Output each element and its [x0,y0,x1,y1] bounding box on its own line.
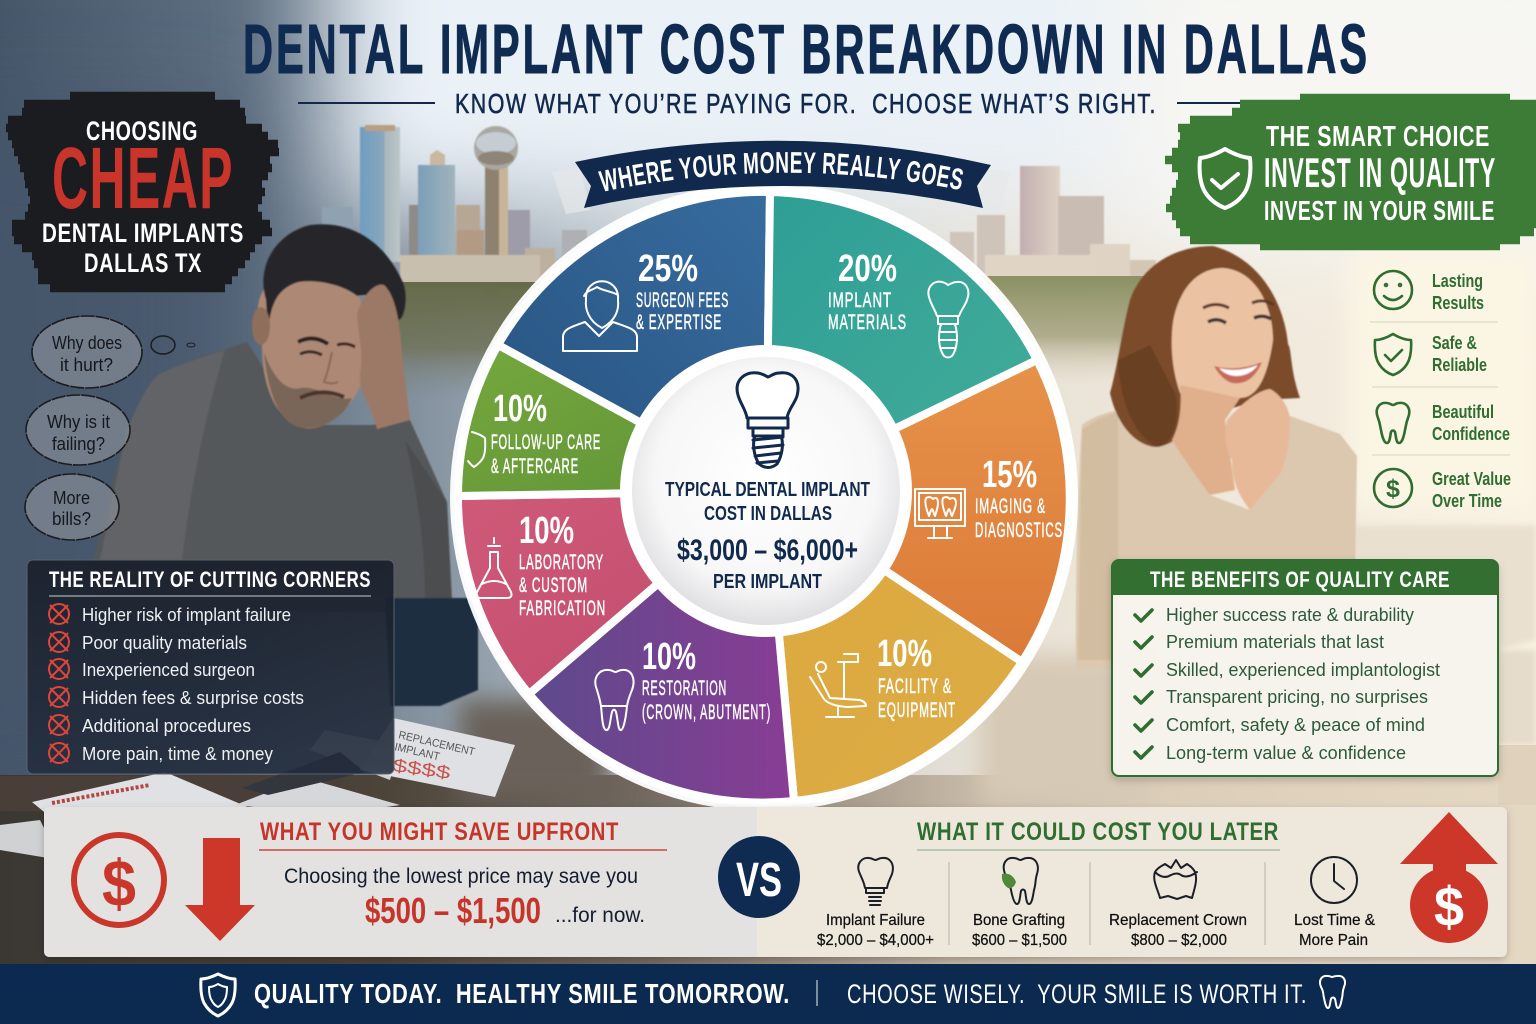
slice: surgeon fees 25%: SURGEON FEES [636,289,729,312]
benefits list: Premium materials that last [1166,632,1384,652]
thought bubble: more bills [25,474,119,540]
benefits list [1135,605,1440,763]
slice: facility 10%: 10% [877,633,932,675]
slice: imaging 15%: IMAGING & [975,495,1046,518]
dental implants dallas tx: DENTAL IMPLANTS [42,218,244,248]
benefit icons list: Beautiful [1432,402,1494,422]
icon: footer shield [201,974,235,1016]
icon: implant [928,282,968,358]
photo: smiling woman [1076,246,1358,778]
photo: worried man [90,224,478,706]
slice: facility 10% [766,491,1022,801]
slice: implant materials 20%: MATERIALS [828,311,907,334]
slice: restoration 10%: (CROWN, ABUTMENT) [642,701,771,724]
benefit icons list: Confidence [1432,424,1510,444]
cost: lost time: More Pain [1299,932,1368,949]
slice: imaging 15%: 15% [982,454,1037,496]
cost: implant failure: $2,000 – $4,000+ [817,932,934,949]
icon: safe shield [1375,334,1411,375]
slice: surgeon fees 25% [498,192,770,491]
ribbon: where your money really goes [554,140,991,214]
heading: WHAT IT COULD COST YOU LATER [917,818,1279,846]
icon: dollar: $ [1386,475,1400,503]
benefit icons list: Over Time [1432,491,1502,511]
cost: bone grafting [972,858,1067,949]
benefit icons list: Results [1432,293,1484,313]
thought bubble: why does it hurt: it hurt? [60,355,113,375]
panel: what it could cost later [817,812,1498,949]
tree line and fog [390,276,1160,402]
slice: follow-up care 10%: & AFTERCARE [491,455,579,478]
slice: laboratory 10%: 10% [519,510,574,552]
ribbon: where your money really goes: WHERE YOUR MONEY REALLY GOES [598,152,963,192]
icon: tooth [1377,403,1409,443]
benefits list: Comfort, safety & peace of mind [1166,715,1425,735]
footer call to action: CHOOSE WISELY. YOUR SMILE IS WORTH IT. [847,979,1307,1009]
vs badge [718,836,800,918]
brush banner: choosing cheap: DALLAS TX [84,248,202,278]
icon: shield check [1200,149,1250,208]
risks list: More pain, time & money [82,744,273,764]
cost: implant failure [817,858,934,949]
slice: laboratory 10%: & CUSTOM [519,574,588,597]
slice: follow-up care 10%: 10% [493,388,547,430]
bills and table [0,718,515,860]
vs badge: VS [736,854,782,907]
thought bubble: why is it failing: failing? [52,434,105,454]
savings copy: Choosing the lowest price may save you [284,865,638,888]
heading: WHAT YOU MIGHT SAVE UPFRONT [260,818,619,846]
icon: surgeon [563,281,637,351]
slice: implant materials 20% [766,192,1037,491]
icon: dollar circle: $ [102,846,136,920]
brush banner: choosing cheap [6,96,279,288]
risks list: Inexperienced surgeon [82,660,255,680]
cost: bone grafting: Bone Grafting [973,912,1065,929]
footer slogan: QUALITY TODAY. HEALTHY SMILE TOMORROW. [254,978,790,1009]
wheel: where your money goes [450,183,1078,811]
benefit icons list: Great Value [1432,469,1511,489]
arrow: up with dollar [1400,812,1498,943]
cost: replacement crown: $800 – $2,000 [1131,932,1227,949]
slice: facility 10%: FACILITY & [878,675,952,698]
slice: imaging 15% [766,360,1070,662]
icon: dental implant [737,373,798,468]
brush banner: the smart choice [1165,98,1536,246]
slice: restoration 10%: RESTORATION [642,677,727,700]
cost: lost time: Lost Time & [1294,912,1375,929]
hub caption: TYPICAL DENTAL IMPLANT [665,479,870,501]
icon: tooth crown [595,670,634,730]
benefit icons list [1370,271,1511,511]
cost: lost time [1294,857,1375,949]
thought bubble: more bills: bills? [52,509,91,529]
icon: dollar [1374,469,1412,507]
center hub [620,345,912,637]
arrow: down [185,838,255,941]
icon: dental chair [810,654,866,717]
slice: surgeon fees 25%: 25% [638,248,698,290]
benefits list: Long-term value & confidence [1166,743,1406,763]
arrow: up with dollar: $ [1434,875,1464,938]
subtitle: KNOW WHAT YOU’RE PAYING FOR. CHOOSE WHAT’S RIGHT. [455,88,1157,119]
icon: monitor x-ray [915,489,965,538]
slice: follow-up care 10%: FOLLOW-UP CARE [491,431,601,454]
icon: shield [468,432,485,467]
center hub: PER IMPLANT [713,571,822,593]
risks list: Additional procedures [82,716,251,736]
risks list: Poor quality materials [82,633,247,653]
slice: restoration 10% [529,491,794,803]
thought bubble: why does it hurt: Why does [52,333,122,353]
benefit icons list: Reliable [1432,355,1487,375]
bills and table: $$$$ [391,755,452,783]
slice: imaging 15%: DIAGNOSTICS [975,519,1063,542]
bills and table: REPLACEMENT [397,729,476,759]
slice: surgeon fees 25%: & EXPERTISE [636,311,722,334]
panel: the benefits of quality care [1112,560,1498,776]
thought bubble: why does it hurt [32,316,195,388]
cost: bone grafting: $600 – $1,500 [972,932,1067,949]
cost: replacement crown: Replacement Crown [1109,912,1247,929]
panel: what you might save [74,818,667,941]
cost: replacement crown [1109,860,1247,949]
benefit icons list: Safe & [1432,333,1477,353]
panel heading: THE REALITY OF CUTTING CORNERS [49,567,371,592]
slice: follow-up care 10% [458,345,766,496]
panel: what you might save: $500 – $1,500 [365,890,541,931]
center hub: COST IN DALLAS [704,503,832,525]
slice: laboratory 10% [458,491,766,694]
choosing: CHOOSING [86,116,198,146]
footer bar [0,964,1536,1024]
panel: the reality of cutting corners [27,560,394,774]
headline [243,10,1370,119]
slice: implant materials 20%: IMPLANT [828,289,892,312]
slice: implant materials 20%: 20% [838,248,897,290]
thought bubble: more bills: More [53,488,90,508]
cost: implant failure: Implant Failure [826,912,925,929]
thought bubble: why is it failing [26,395,130,465]
hub price: $3,000 – $6,000+ [677,534,858,567]
risks list [49,604,304,764]
benefits list: Skilled, experienced implantologist [1166,660,1440,680]
risks list: Hidden fees & surprise costs [82,688,304,708]
slice: laboratory 10%: FABRICATION [519,597,606,620]
icon: footer tooth [1320,976,1345,1008]
slice: laboratory 10%: LABORATORY [519,551,604,574]
cheap: CHEAP [52,130,234,227]
icon: dollar circle [74,835,164,925]
benefits list: Higher success rate & durability [1166,605,1414,625]
slice: facility 10%: EQUIPMENT [878,699,956,722]
thought bubble: why is it failing: Why is it [47,412,110,432]
benefit icons list: Lasting [1432,271,1483,291]
benefits list: Transparent pricing, no surprises [1166,687,1428,707]
icon: smiley [1374,271,1412,309]
panel heading: THE BENEFITS OF QUALITY CARE [1150,567,1450,592]
slice: restoration 10%: 10% [642,636,696,678]
bills and table: IMPLANT [393,741,441,763]
comparison strip [44,807,1507,957]
panel: what you might save: ...for now. [555,904,645,927]
icon: flask [476,538,512,598]
risks list: Higher risk of implant failure [82,605,291,625]
dallas skyline [322,125,1156,297]
